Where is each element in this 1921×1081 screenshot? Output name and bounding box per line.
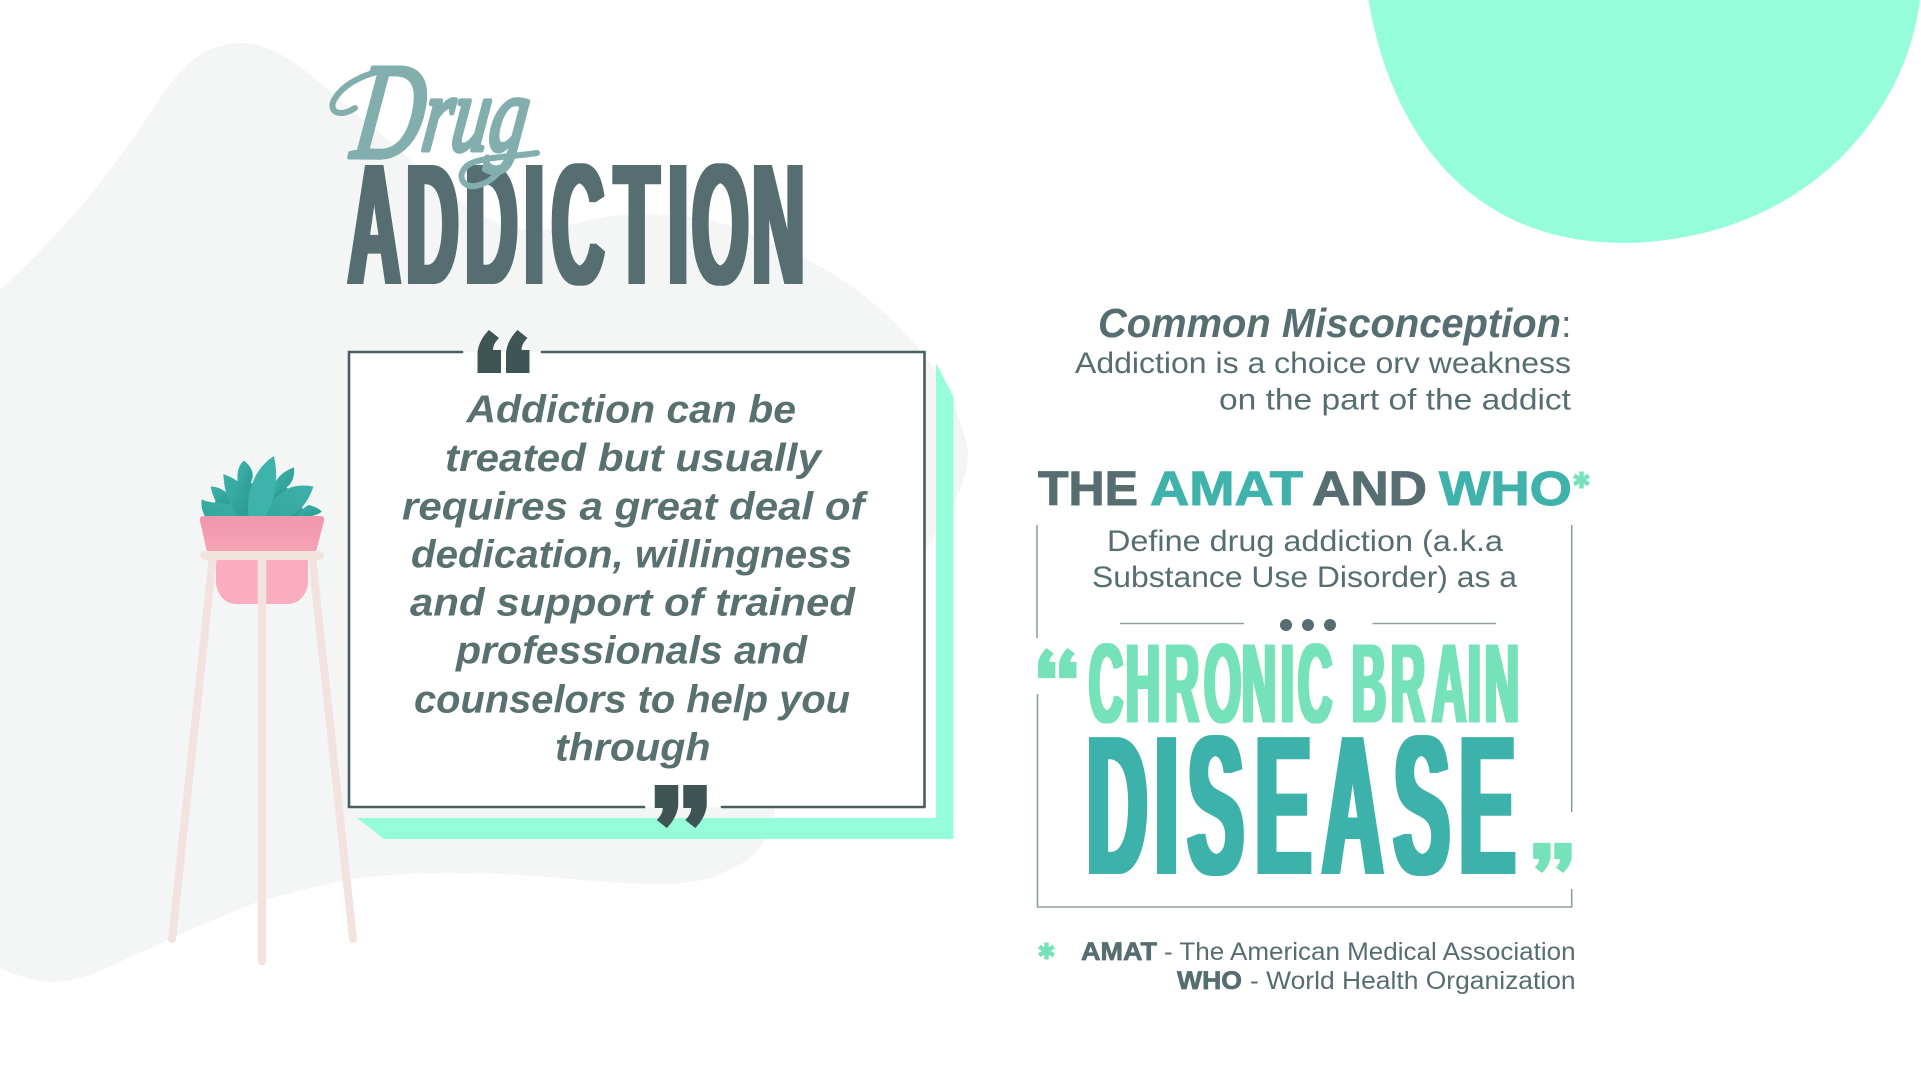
icon: opening quote	[478, 330, 530, 373]
quote text: through	[555, 726, 710, 770]
footnote: ✱	[1037, 940, 1056, 965]
heading: the AMAT and WHO	[1038, 463, 1591, 516]
heading: the AMAT and WHO: WHO	[1439, 463, 1572, 516]
quote panel	[349, 330, 924, 828]
title	[332, 36, 805, 322]
common misconception text: Addiction is a choice orv weakness	[1075, 347, 1571, 380]
footnote: WHO	[1177, 967, 1242, 995]
quote box	[349, 352, 924, 807]
stand crossbar	[200, 551, 324, 560]
quote text	[402, 388, 869, 770]
title word: Drug	[332, 36, 540, 187]
title word: Drug: D	[346, 36, 436, 187]
heading: the AMAT and WHO: ✱	[1572, 469, 1591, 494]
lower pot	[216, 556, 308, 604]
heading: the AMAT and WHO: THE	[1038, 463, 1138, 516]
quote text: dedication, willingness	[411, 534, 852, 576]
footnote: AMAT	[1081, 938, 1157, 966]
footnote: - The American Medical Association	[1164, 938, 1576, 966]
quote text: counselors to help you	[414, 678, 850, 722]
divider with dots	[1120, 619, 1496, 631]
headline: disease: DISEASE	[1087, 695, 1515, 917]
definition text	[1092, 525, 1517, 594]
footnote: - World Health Organization	[1250, 967, 1576, 995]
common misconception text: :	[1561, 304, 1572, 346]
background blob	[0, 43, 968, 982]
upper pot	[200, 516, 324, 552]
quote text: requires a great deal of	[402, 486, 869, 528]
common misconception text: Common Misconception	[1098, 300, 1561, 346]
heading: the AMAT and WHO: AND	[1312, 463, 1427, 516]
plant on stand	[172, 456, 353, 961]
common misconception text	[1075, 300, 1572, 416]
quote text: Addiction can be	[465, 388, 796, 432]
icon: green closing quote	[1533, 843, 1572, 873]
mint corner shape	[1368, 0, 1920, 243]
icon: closing quote	[655, 785, 707, 828]
quote box border	[349, 352, 924, 807]
headline: chronic brain: CHRONIC BRAIN	[1089, 622, 1519, 747]
title word: ADDICTION: ADDICTION	[348, 129, 805, 322]
quote text: and support of trained	[410, 582, 856, 624]
quote text: treated but usually	[445, 437, 824, 480]
heading: the AMAT and WHO: AMAT	[1150, 463, 1303, 516]
mint quote shadow	[357, 363, 954, 839]
common misconception text: on the part of the addict	[1219, 384, 1572, 416]
plant leaves	[201, 456, 322, 517]
quote text: professionals and	[455, 630, 808, 672]
footnote	[1037, 938, 1576, 995]
title word: Drug: rug	[416, 56, 537, 174]
stand legs	[172, 556, 353, 961]
definition frame	[1037, 525, 1572, 907]
icon: green opening quote	[1038, 648, 1076, 678]
definition text: Define drug addiction (a.k.a	[1107, 525, 1503, 558]
definition text: Substance Use Disorder) as a	[1092, 561, 1517, 594]
